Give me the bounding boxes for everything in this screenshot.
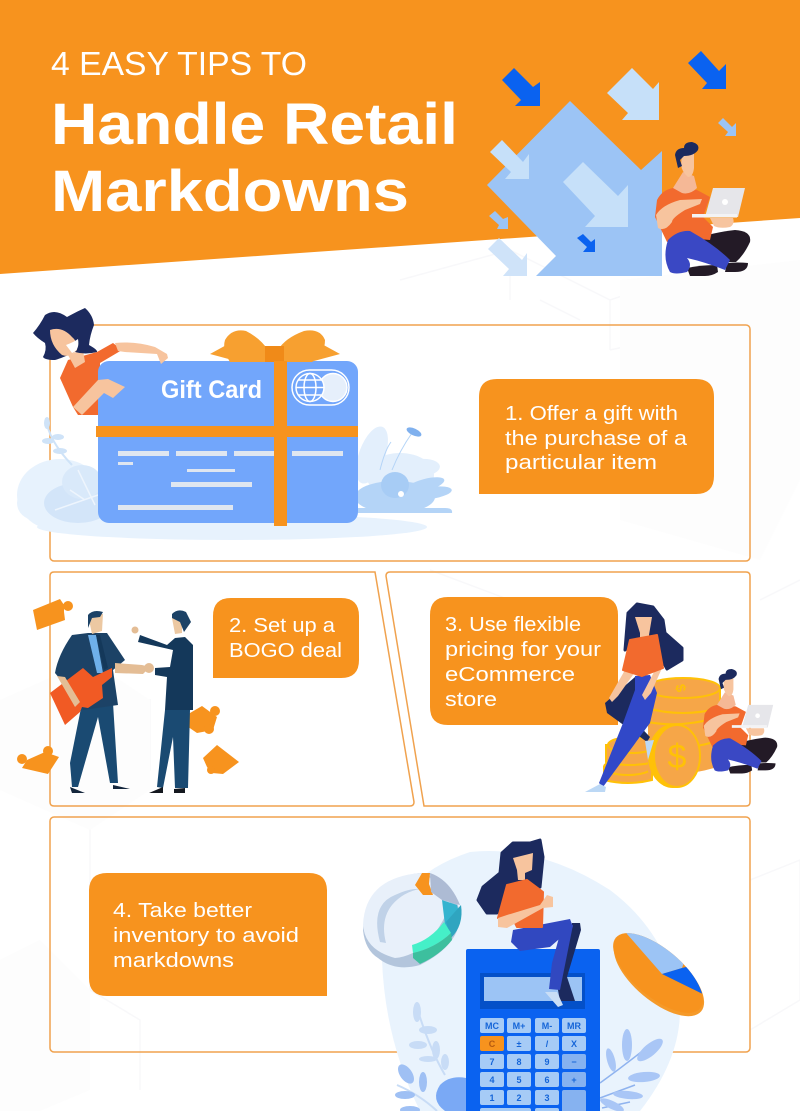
tip 4 callout: markdowns xyxy=(113,950,234,972)
panel 1 frame xyxy=(50,325,750,561)
calculator key labels: 2 xyxy=(516,1093,522,1103)
tip 1 callout: particular item xyxy=(505,452,657,474)
coin stacks: $ xyxy=(672,683,690,694)
puzzle pieces xyxy=(17,599,239,774)
card title: Gift Card xyxy=(161,376,262,404)
woman on calculator xyxy=(478,840,581,1007)
large coin xyxy=(648,724,700,788)
tip 3 callout xyxy=(430,597,618,725)
illustration: calculator with woman and charts xyxy=(363,840,717,1111)
pie chart xyxy=(613,933,704,1016)
calculator key labels: 6 xyxy=(544,1075,550,1085)
panel 4 frame xyxy=(50,817,750,1052)
calculator key labels: X xyxy=(571,1039,577,1049)
illustration: gift card with woman xyxy=(17,308,453,540)
calculator key labels: + xyxy=(571,1075,577,1085)
illustration: falling arrows and man with laptop xyxy=(487,51,750,276)
calculator key labels: C xyxy=(489,1039,496,1049)
man with laptop small xyxy=(703,669,777,773)
calculator screen xyxy=(480,973,585,1009)
tip 4 callout xyxy=(89,873,327,996)
calculator key labels: ± xyxy=(517,1039,522,1049)
illustration: woman, coin stacks and man xyxy=(585,604,777,792)
tip 1 callout xyxy=(479,379,714,494)
calculator key labels xyxy=(485,1021,581,1103)
tip 4 callout: 4. Take better xyxy=(113,900,252,922)
calculator xyxy=(466,949,600,1111)
small arrows xyxy=(488,51,736,276)
foliage left xyxy=(17,417,427,540)
left man xyxy=(50,611,150,793)
calculator key labels: 3 xyxy=(544,1093,550,1103)
calculator key labels: MR xyxy=(567,1021,581,1031)
large coin: $ xyxy=(668,738,687,776)
calculator key labels: MC xyxy=(485,1021,499,1031)
illustration: businessmen handshake and puzzle pieces xyxy=(17,599,239,793)
tip 3 callout: store xyxy=(445,689,497,711)
woman peeking xyxy=(33,308,122,415)
title line 2: Markdowns xyxy=(51,159,409,224)
calculator key labels: 8 xyxy=(516,1057,522,1067)
calculator key labels: 5 xyxy=(516,1075,522,1085)
tip 2 callout: BOGO deal xyxy=(229,640,342,662)
calculator keys xyxy=(480,1018,586,1111)
header banner xyxy=(0,0,800,274)
calculator key labels: / xyxy=(546,1039,549,1049)
calculator key labels: 7 xyxy=(489,1057,495,1067)
calculator key labels: M+ xyxy=(513,1021,525,1031)
ribbon and bow xyxy=(96,330,358,526)
calculator key labels: − xyxy=(571,1057,577,1067)
foliage right xyxy=(350,422,453,513)
tip 2 callout: 2. Set up a xyxy=(229,615,336,637)
background blob xyxy=(382,851,680,1111)
right man xyxy=(132,610,193,793)
calculator key labels: M- xyxy=(542,1021,552,1031)
big down arrow xyxy=(487,101,662,276)
title xyxy=(51,45,458,224)
tip 3 callout: pricing for your xyxy=(445,639,601,661)
card text lines xyxy=(118,451,343,510)
background hex pattern xyxy=(0,250,800,1111)
tip 1 callout: the purchase of a xyxy=(505,428,688,450)
tip 1 callout: 1. Offer a gift with xyxy=(505,403,678,425)
card logo globe xyxy=(292,370,349,405)
coin stacks xyxy=(604,678,720,783)
calculator key labels: 1 xyxy=(489,1093,495,1103)
calculator key labels: 4 xyxy=(489,1075,495,1085)
panel 2 frame xyxy=(50,572,414,806)
woman leaning xyxy=(585,604,682,792)
panel 3 frame xyxy=(386,572,750,806)
faint background hexagons xyxy=(0,260,800,1111)
tip 2 callout xyxy=(213,598,359,678)
woman's arms over card xyxy=(73,342,168,415)
gift card body xyxy=(98,361,358,523)
man with laptop xyxy=(655,142,750,276)
title line 1: Handle Retail xyxy=(51,92,458,157)
calculator key labels: 9 xyxy=(544,1057,550,1067)
plants xyxy=(395,1002,666,1111)
tip 3 callout: 3. Use flexible xyxy=(445,614,581,636)
title kicker: 4 EASY TIPS TO xyxy=(51,45,307,82)
tip 3 callout: eCommerce xyxy=(445,664,575,686)
donut chart xyxy=(363,873,462,967)
tip 4 callout: inventory to avoid xyxy=(113,925,299,947)
